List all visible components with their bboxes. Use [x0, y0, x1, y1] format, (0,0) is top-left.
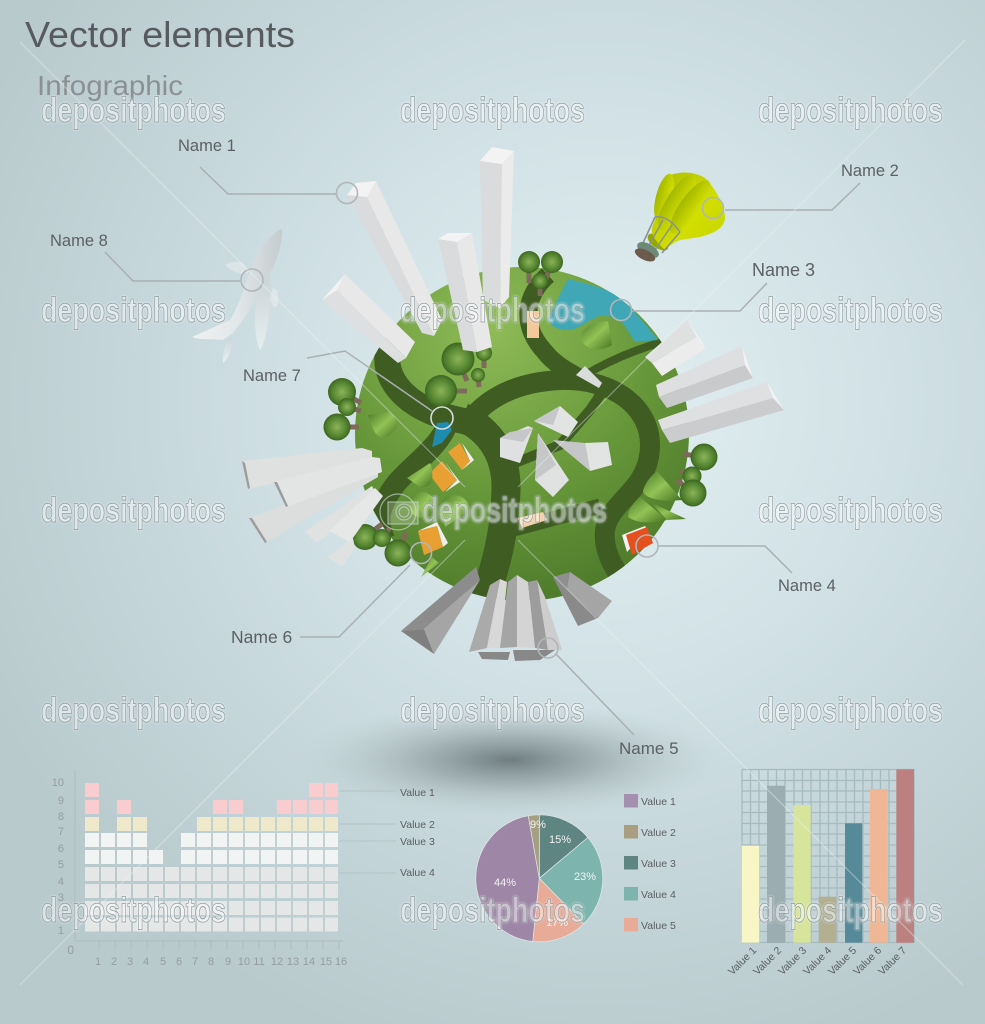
x axis labels: 2 [111, 956, 117, 968]
orange house 3 [418, 522, 448, 555]
bar chart [726, 769, 914, 978]
pie chart: 44% [494, 877, 516, 889]
subtitle: Infographic [37, 70, 183, 101]
stacked grid chart [52, 770, 435, 968]
x axis labels [95, 956, 347, 968]
center white blocks [500, 406, 612, 497]
building G1 [401, 567, 480, 654]
value legend with leaders: Value 3 [400, 836, 435, 848]
leader: Name 5: Name 5 [619, 739, 679, 758]
watermarks: depositphotos [41, 891, 226, 930]
leader: Name 8 [50, 232, 263, 291]
pie legend: Value 3 [641, 858, 676, 870]
leader: Name 1 [178, 137, 358, 204]
x axis labels: 13 [287, 956, 299, 968]
leader: Name 8: Name 8 [50, 232, 108, 250]
pie chart: 17% [546, 917, 568, 929]
leader: Name 4: Name 4 [778, 577, 836, 595]
leader: Name 7: Name 7 [243, 367, 301, 385]
x axis labels: 6 [176, 956, 182, 968]
cone trees [368, 321, 686, 577]
y axis labels: 3 [58, 892, 64, 904]
pie legend: Value 4 [641, 889, 676, 901]
pie legend: Value 2 [641, 827, 676, 839]
x axis labels: 14 [303, 956, 315, 968]
building L3 [249, 470, 378, 543]
building: leaning left tall [347, 181, 442, 336]
trees [324, 251, 718, 566]
building: low left [322, 274, 415, 363]
pie chart: 15% [549, 834, 571, 846]
roads [380, 275, 662, 605]
hot air balloon [633, 169, 725, 264]
bar labels: Value 7 [876, 945, 909, 978]
leader: Name 6 [231, 542, 432, 647]
x axis labels: 8 [208, 956, 214, 968]
value legend with leaders: Value 4 [400, 867, 435, 879]
y axis labels: 8 [58, 811, 64, 823]
leader: Name 2 [702, 162, 899, 218]
building: tallest [480, 147, 514, 308]
watermarks: depositphotos [400, 291, 585, 330]
grid cells pink [85, 783, 338, 814]
pie legend: Value 5 [641, 920, 676, 932]
building R2 [656, 346, 753, 408]
bar labels: Value 1 [726, 945, 759, 978]
x axis labels: 5 [160, 956, 166, 968]
leader: Name 7 [243, 351, 453, 429]
bar labels: Value 4 [801, 945, 834, 978]
leader: Name 5 [538, 638, 679, 758]
building R3 [658, 382, 784, 443]
peach building [518, 512, 547, 528]
value legend with leaders: Value 1 [400, 787, 435, 799]
leader: Name 3: Name 3 [752, 260, 815, 280]
x axis labels: 11 [253, 956, 265, 968]
watermarks: depositphotos [41, 491, 226, 530]
x axis labels: 3 [127, 956, 133, 968]
airplane [192, 229, 282, 363]
x axis labels: 10 [238, 956, 250, 968]
leader: Name 2: Name 2 [841, 162, 899, 180]
bar chart grid [742, 770, 914, 942]
leader: Name 6: Name 6 [231, 627, 292, 647]
icon: watermark camera [380, 494, 418, 530]
watermarks: depositphotos [41, 91, 226, 130]
watermarks: depositphotos [400, 91, 585, 130]
pie chart [476, 815, 603, 942]
chart axes [75, 770, 343, 950]
bar labels: Value 6 [851, 945, 884, 978]
building L2 [274, 457, 382, 507]
bars [742, 769, 914, 943]
small white car [576, 366, 602, 388]
y axis labels [52, 777, 74, 957]
bar labels: Value 5 [826, 945, 859, 978]
value legend with leaders [339, 787, 435, 879]
ground shadow under globe [295, 702, 725, 818]
tall white buildings, top [322, 147, 514, 363]
white buildings, left [242, 448, 383, 567]
y axis labels: 6 [58, 843, 64, 855]
bar labels [726, 945, 909, 978]
building G3 [553, 572, 612, 626]
watermarks: depositphotos [41, 691, 226, 730]
bar labels: Value 2 [751, 945, 784, 978]
grid cells tan [85, 817, 338, 831]
bar labels: Value 3 [776, 945, 809, 978]
white buildings, right [645, 320, 784, 443]
beige building [527, 311, 539, 338]
y axis labels: 4 [58, 876, 64, 888]
leader: Name 4 [636, 535, 836, 595]
pie chart: 9% [530, 819, 546, 831]
building L4 [305, 486, 377, 543]
y axis labels: 1 [58, 925, 64, 937]
building trio [469, 575, 562, 661]
watermarks: depositphotos [422, 491, 607, 530]
title: Vector elements [25, 14, 295, 55]
blue building [432, 422, 452, 447]
y axis labels: 7 [58, 826, 64, 838]
grey buildings, bottom [401, 567, 612, 661]
value legend with leaders: Value 2 [400, 819, 435, 831]
orange house 2 [448, 443, 474, 470]
building R1 [645, 320, 706, 376]
y axis labels: 5 [58, 859, 64, 871]
y axis labels: 0 [67, 943, 74, 957]
watermarks [41, 91, 943, 930]
pie legend: Value 1 [641, 796, 676, 808]
pie chart: 23% [574, 871, 596, 883]
lake [547, 279, 658, 342]
leader: Name 1: Name 1 [178, 137, 236, 155]
x axis labels: 15 [320, 956, 332, 968]
watermarks: depositphotos [400, 891, 585, 930]
pie legend [624, 794, 676, 932]
y axis labels: 2 [58, 909, 64, 921]
leader: Name 3 [610, 260, 815, 320]
x axis labels: 7 [192, 956, 198, 968]
globe [355, 267, 689, 605]
orange house 1 [429, 461, 460, 492]
x axis labels: 9 [225, 956, 231, 968]
watermarks: depositphotos [400, 691, 585, 730]
y axis labels: 10 [52, 777, 64, 789]
x axis labels: 16 [335, 956, 347, 968]
watermarks: depositphotos [41, 291, 226, 330]
building L5 [329, 488, 383, 542]
y axis labels: 9 [58, 795, 64, 807]
x axis labels: 1 [95, 956, 101, 968]
grid cells grey [85, 867, 338, 932]
x axis labels: 12 [271, 956, 283, 968]
building: middle [438, 233, 492, 352]
building L6 [327, 538, 355, 567]
building L1 [242, 448, 372, 489]
x axis labels: 4 [143, 956, 149, 968]
grid cells white [85, 833, 338, 864]
red house [622, 526, 653, 555]
